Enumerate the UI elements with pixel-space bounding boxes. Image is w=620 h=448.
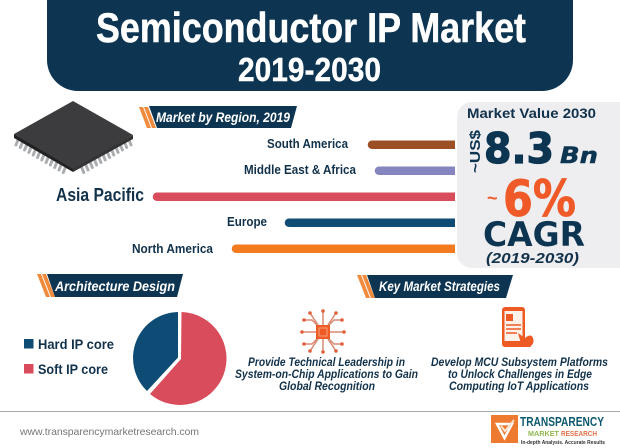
ribbon: market by region xyxy=(139,106,297,128)
bar: north america xyxy=(132,242,455,256)
legend xyxy=(24,336,114,377)
logo: RESEARCH xyxy=(561,429,597,438)
text: strategy two: Computing IoT Applications xyxy=(449,381,589,393)
legend: hard ip core: Hard IP core xyxy=(38,336,114,352)
market value heading: Market Value 2030 xyxy=(467,105,596,121)
ribbon: key market strategies: Key Market Strategies xyxy=(379,279,500,294)
market value number: 8.3 xyxy=(484,124,554,173)
cagr period: (2019-2030) xyxy=(486,250,579,267)
text: strategy one: System-on-Chip Applications to Gain xyxy=(235,369,418,381)
bar: asia pacific: Asia Pacific xyxy=(56,185,144,205)
legend: soft ip core: Soft IP core xyxy=(38,361,108,377)
title: Semiconductor IP Market xyxy=(96,4,526,51)
text: strategy one: Global Recognition xyxy=(279,381,375,393)
icon: smartphone xyxy=(502,307,534,347)
logo xyxy=(491,415,605,446)
ribbon: architecture design: Architecture Design xyxy=(54,279,175,294)
text: strategy two: to Unlock Challenges in Edge xyxy=(448,369,593,381)
icon: microchip xyxy=(14,101,133,172)
bar: asia pacific xyxy=(56,185,455,205)
cagr tilde: ~ xyxy=(487,188,498,208)
bar: middle east and africa: Middle East & Africa xyxy=(244,163,357,177)
bar chart: market by region xyxy=(56,137,455,256)
logo: In-depth Analysis. Accurate Results xyxy=(521,440,605,446)
bar: north america: North America xyxy=(132,242,214,256)
text: strategy two xyxy=(431,357,608,393)
bar: middle east and africa xyxy=(244,163,455,177)
website url: www.transparencymarketresearch.com xyxy=(19,426,199,438)
bar: europe: Europe xyxy=(227,215,267,229)
pie chart xyxy=(133,312,227,405)
ribbon: market by region: Market by Region, 2019 xyxy=(156,110,290,125)
text: strategy one: Provide Technical Leadership in xyxy=(248,357,405,369)
logo mark xyxy=(491,415,518,443)
ribbon: architecture design xyxy=(37,274,183,297)
cagr label: CAGR xyxy=(483,215,585,255)
currency prefix: ~US$ xyxy=(468,130,484,173)
text: strategy one xyxy=(235,357,418,393)
cagr value: 6% xyxy=(503,170,576,228)
subtitle years: 2019-2030 xyxy=(238,51,381,88)
market value unit: Bn xyxy=(560,144,598,169)
bar: south america xyxy=(267,137,455,151)
title banner xyxy=(47,0,573,91)
bar: south america: South America xyxy=(267,137,349,151)
bar: europe xyxy=(227,215,455,229)
panel: market value and cagr xyxy=(457,102,620,268)
icon: circuit chip xyxy=(300,309,346,354)
logo: MARKET xyxy=(528,429,559,438)
ribbon: key market strategies xyxy=(357,275,513,298)
